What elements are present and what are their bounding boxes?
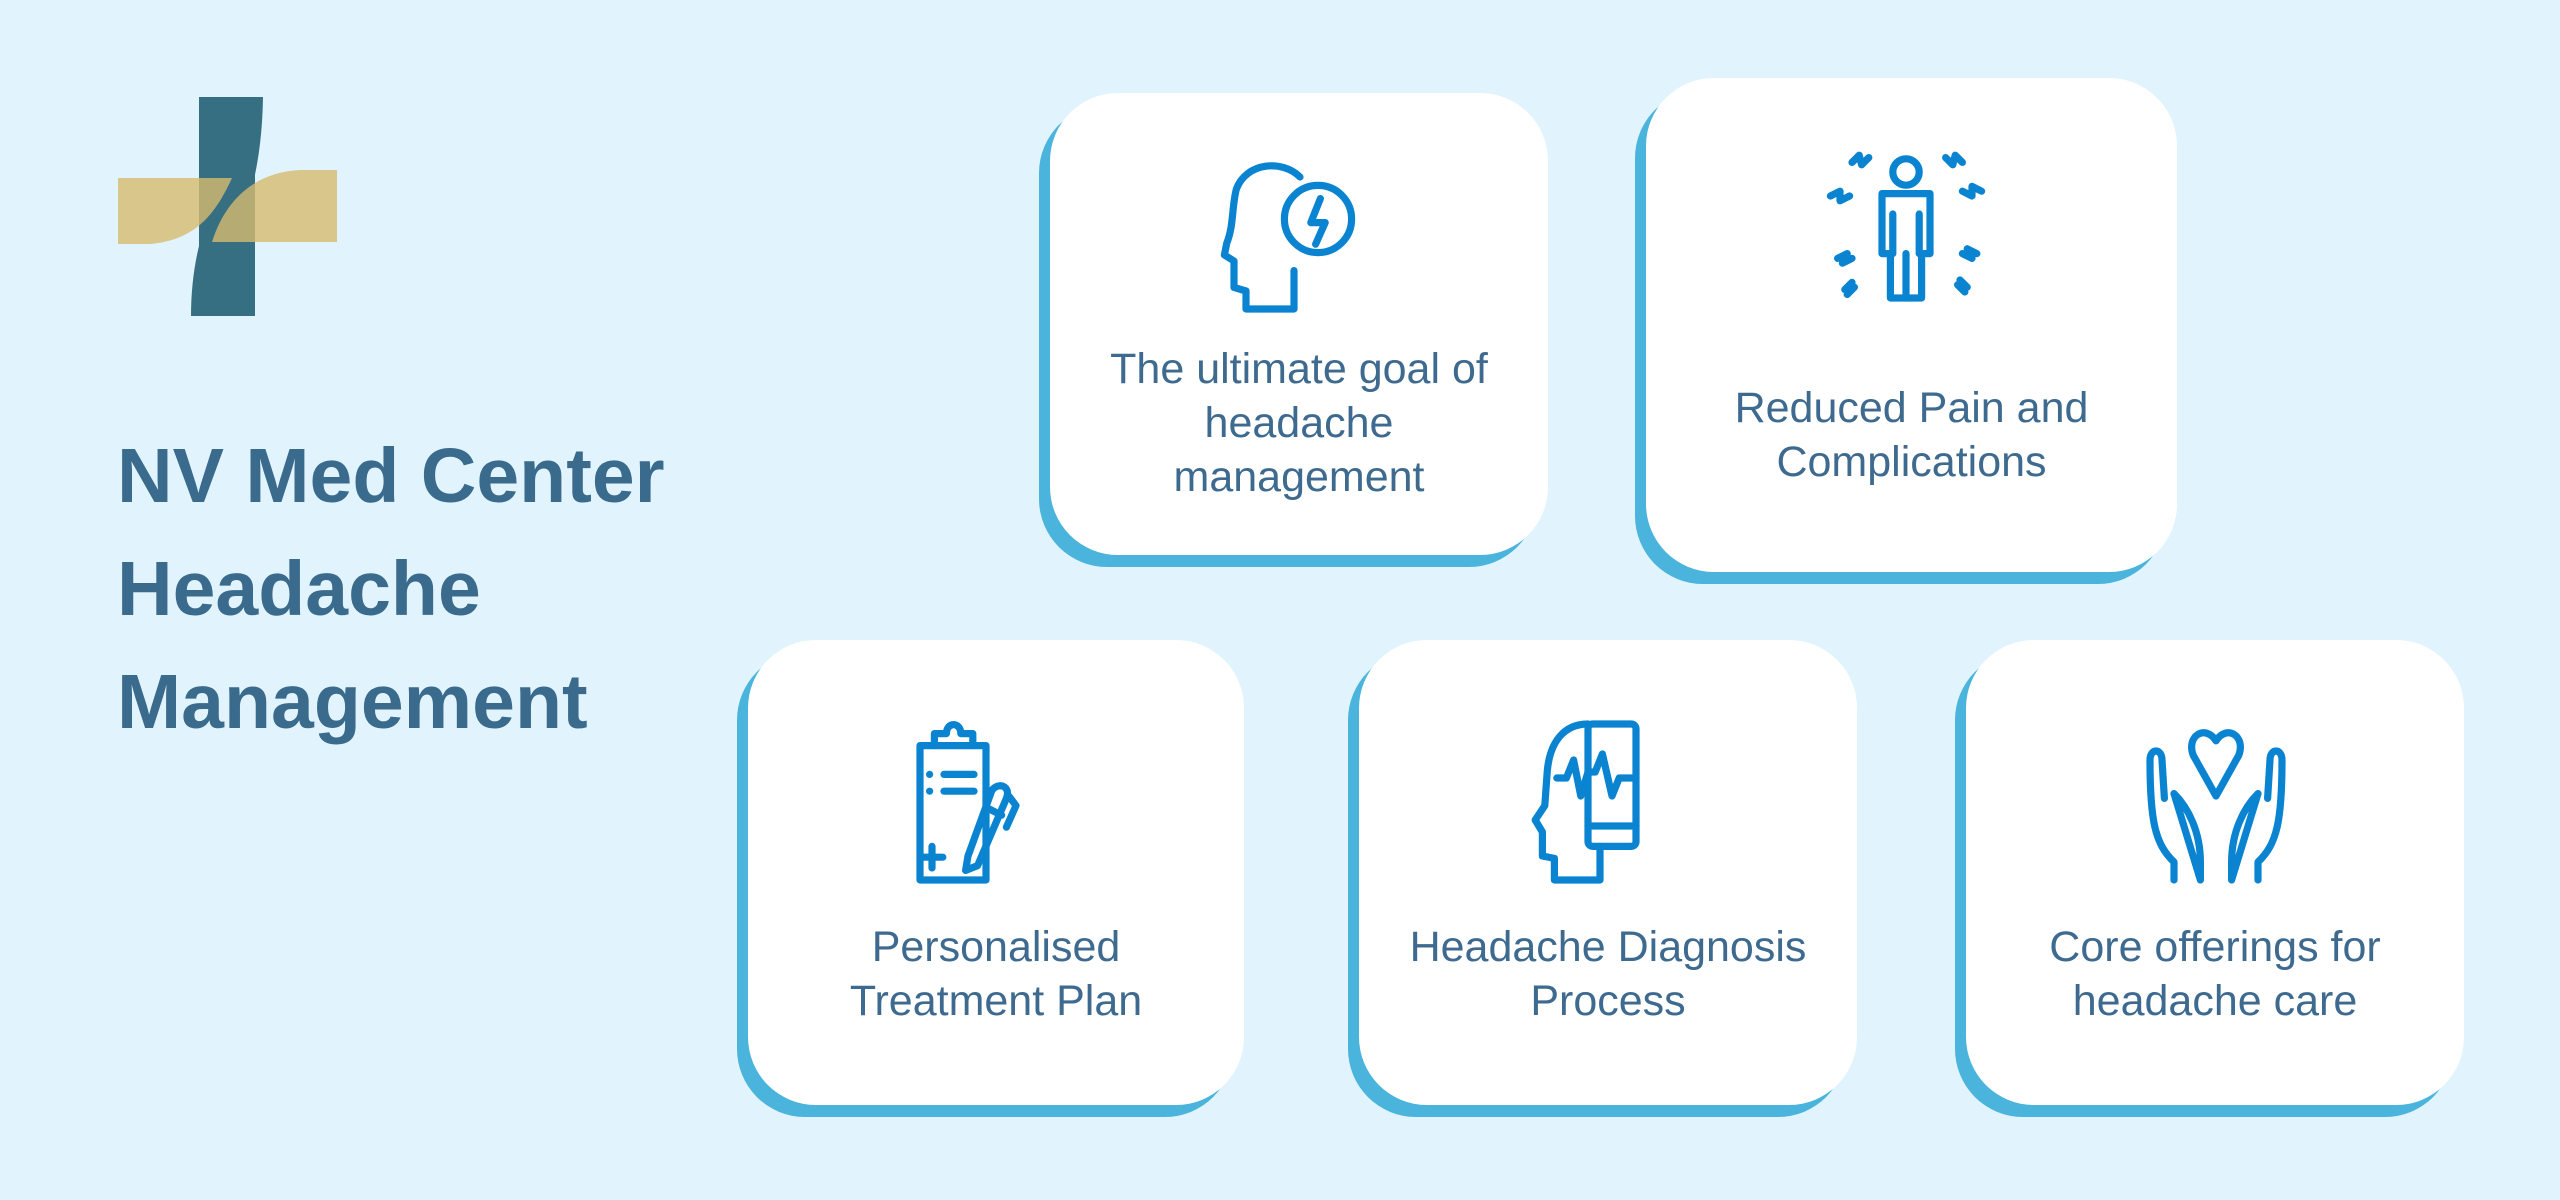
card: core offerings: [1966, 640, 2464, 1105]
text: Core offerings for: [2049, 923, 2381, 971]
card: personalised treatment: [748, 640, 1244, 1105]
card: ultimate goal: [1050, 93, 1548, 555]
text: [1110, 345, 1488, 501]
icon: person in pain: [1826, 152, 1986, 302]
text: [2049, 923, 2381, 1025]
title: Headache: [117, 546, 481, 632]
text: Complications: [1776, 438, 2047, 486]
text: [1410, 923, 1806, 1025]
title: Management: [117, 659, 588, 745]
icon: clipboard with pen: [916, 721, 1020, 884]
icon: head with lightning: [1220, 162, 1356, 313]
text: The ultimate goal of: [1110, 345, 1488, 393]
text: Process: [1530, 977, 1686, 1025]
text: headache care: [2073, 977, 2357, 1025]
title: NV Med Center: [117, 433, 665, 519]
icon: hands with heart: [2146, 729, 2286, 884]
text: management: [1174, 453, 1424, 501]
title: [117, 433, 665, 745]
text: Personalised: [872, 923, 1120, 971]
text: [1735, 384, 2088, 486]
text: Reduced Pain and: [1735, 384, 2088, 432]
text: headache: [1205, 399, 1393, 447]
card: reduced pain: [1646, 78, 2177, 572]
icon: head with monitor: [1532, 720, 1640, 884]
text: Headache Diagnosis: [1410, 923, 1806, 971]
card: diagnosis process: [1359, 640, 1857, 1105]
text: Treatment Plan: [850, 977, 1142, 1025]
text: [850, 923, 1142, 1025]
logo: [118, 97, 337, 316]
